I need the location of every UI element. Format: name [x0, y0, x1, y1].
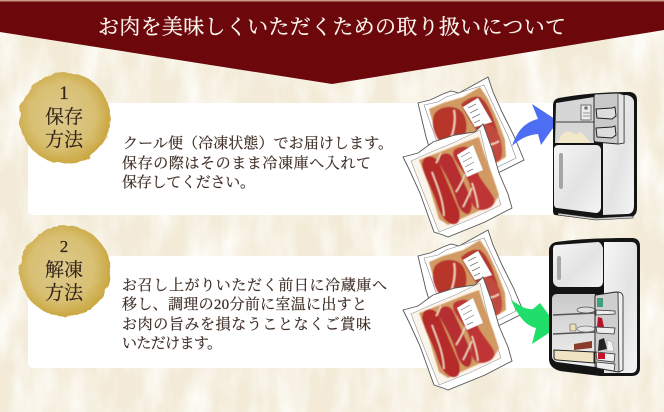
- badge: 1 storage: 方法: [45, 129, 84, 151]
- meat packs: storage: [403, 77, 524, 237]
- meat packs: thawing: [403, 230, 524, 390]
- icon: freezer fridge: [553, 92, 637, 220]
- icon: open refrigerator: [549, 238, 640, 376]
- badge: 1 storage: 保存: [45, 106, 83, 128]
- panel: storage method: [20, 72, 555, 215]
- storage instructions: [122, 135, 393, 191]
- storage instructions: 保存してください。: [122, 174, 255, 191]
- badge: 1 storage: 1: [59, 83, 69, 104]
- thawing instructions: いただけます。: [122, 336, 222, 352]
- title banner: [0, 0, 664, 84]
- badge: 2 thawing: 解凍: [45, 259, 83, 281]
- thawing instructions: 移し、調理の20分前に室温に出すと: [122, 295, 367, 313]
- thawing instructions: お肉の旨みを損なうことなくご賞味: [122, 316, 371, 333]
- title: お肉を美味しくいただくための取り扱いについて: [98, 15, 566, 39]
- thawing instructions: [122, 276, 387, 352]
- badge: 2 thawing: [20, 226, 110, 316]
- thawing instructions: お召し上がりいただく前日に冷蔵庫へ: [122, 276, 387, 294]
- badge: 1 storage: [20, 72, 110, 164]
- arrow: into freezer: [512, 104, 558, 146]
- badge: 2 thawing: 方法: [45, 282, 84, 304]
- storage instructions: クール便（冷凍状態）でお届けします。: [123, 135, 393, 152]
- storage instructions: 保存の際はそのまま冷凍庫へ入れて: [122, 154, 371, 172]
- panel: thawing method: [20, 226, 555, 368]
- arrow: into refrigerator: [511, 300, 558, 344]
- badge: 2 thawing: 2: [60, 237, 68, 256]
